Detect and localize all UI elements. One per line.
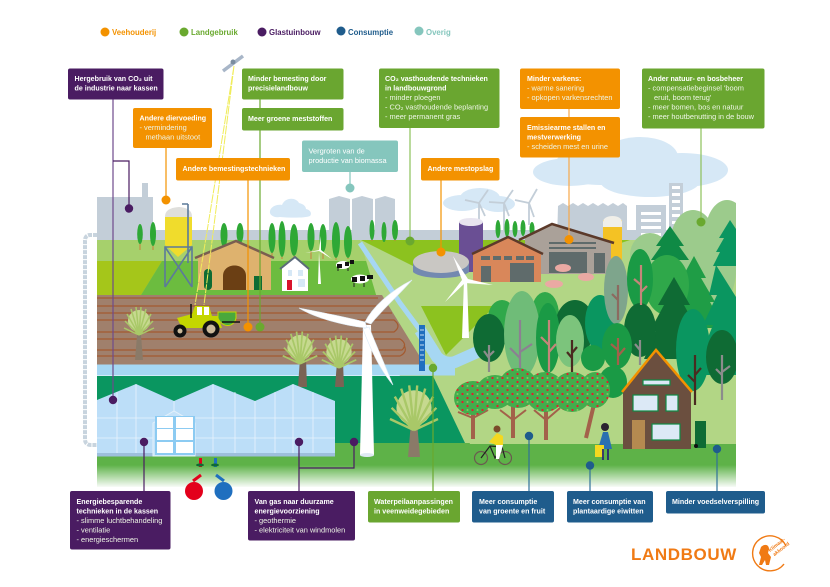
connector: waterpeil [429, 364, 437, 491]
connector: Hergebruik van CO2 [109, 99, 133, 404]
pipes [196, 458, 219, 467]
callout: Andere diervoeding [133, 108, 212, 148]
grass strip [97, 443, 736, 487]
callout: Minder bemesting: precisielandbouw [248, 84, 308, 92]
legend: Glastuinbouw: Glastuinbouw [269, 28, 321, 37]
callout: Meer consumptie plantaardige: plantaardige eiwitten [573, 508, 644, 516]
callout: Meer consumptie groente [472, 491, 554, 522]
callout: Emissiearme stallen: Emissiearme stallen en [527, 124, 605, 132]
callout: Van gas naar duurzame: - geothermie [254, 516, 296, 525]
callout: Andere diervoeding: - vermindering [140, 123, 187, 132]
callout: Minder bemesting [242, 68, 344, 100]
legend: Landgebruik: Landgebruik [191, 28, 238, 37]
callout: biomassa: productie van biomassa [308, 156, 387, 165]
callout: Minder varkens: Minder varkens: [527, 75, 581, 83]
legend: Consumptie [336, 26, 394, 37]
callout: Minder varkens: - warme sanering [527, 84, 584, 92]
water level gauge [419, 325, 425, 371]
callout: Energiebesparende technieken: - energieschermen [76, 535, 138, 544]
callout: Meer consumptie plantaardige: Meer consumptie van [573, 498, 646, 506]
big cloud [533, 137, 728, 197]
callout: Ander natuur- en bosbeheer: Ander natuur- en bosbeheer [648, 75, 743, 83]
callout: Andere bemestingstechnieken: Andere bemestingstechnieken [182, 165, 285, 173]
callout: Energiebesparende technieken: technieken in de kassen [76, 508, 158, 516]
satellite with beam [195, 56, 243, 305]
ploughed field [97, 295, 425, 365]
callout: CO2 vasthoudende technieken: - CO₂ vasthoudende beplanting [385, 102, 488, 112]
callout: Andere diervoeding: methaan uitstoot [146, 132, 200, 142]
grey pipe [85, 235, 97, 445]
callout: CO2 vasthoudende technieken: in landbouwgrond [385, 84, 446, 92]
callout: Hergebruik van CO2: Hergebruik van CO₂ uit [74, 75, 153, 83]
building windows [641, 186, 680, 236]
callout: Waterpeilaanpassingen: in veenweidegebieden [374, 508, 449, 516]
willows [124, 307, 438, 457]
callout: Meer groene meststoffen: Meer groene meststoffen [248, 115, 332, 123]
callout: biomassa: Vergroten van de [308, 146, 365, 156]
callout: Minder bemesting: Minder bemesting door [248, 75, 327, 83]
callout: Van gas naar duurzame [248, 491, 355, 540]
small clouds [270, 188, 515, 218]
connector: varkens [564, 109, 574, 244]
pigs [545, 264, 594, 288]
callout: Van gas naar duurzame: energievoorziening [254, 508, 320, 516]
callout: Minder varkens: - opkopen varkensrechten [527, 93, 612, 102]
orchard [454, 368, 610, 440]
callout: Waterpeilaanpassingen [368, 491, 460, 522]
scene illustration [97, 183, 749, 488]
horizon buildings [97, 183, 737, 242]
callout: Andere diervoeding: Andere diervoeding [140, 114, 206, 122]
callout: Emissiearme stallen: mestverwerking [527, 134, 581, 142]
callout: Van gas naar duurzame: - elektriciteit van windmolen [254, 526, 345, 534]
callout: Hergebruik van CO2 [68, 68, 164, 100]
callout: Van gas naar duurzame: Van gas naar duurzame [254, 498, 334, 506]
legend: Overig [414, 26, 451, 37]
cows [336, 260, 373, 287]
bottom fade [97, 465, 737, 488]
back forest hills [630, 200, 736, 306]
connector: groene meststoffen [256, 99, 264, 332]
callout: Energiebesparende technieken: Energiebesparende [76, 498, 142, 506]
connector: plantaardige eiwitten [586, 461, 594, 491]
callout: CO2 vasthoudende technieken: CO₂ vasthoudende technieken [385, 75, 488, 83]
callout: Ander natuur- en bosbeheer: - compensatiebeginsel 'boom [648, 84, 744, 92]
light orchard ground [470, 443, 736, 444]
forest trees [473, 249, 738, 405]
orange stable [472, 237, 543, 282]
callout: Ander natuur- en bosbeheer: - meer bomen, bos en natuur [648, 102, 744, 112]
connector: natuur [696, 128, 706, 226]
callout: Emissiearme stallen [520, 117, 620, 158]
callout: Ander natuur- en bosbeheer [642, 68, 764, 128]
small wind turbine [305, 236, 332, 284]
water [97, 243, 482, 370]
logo: Klimaatakkoord: Klimaat- [768, 537, 787, 554]
legend: Consumptie: Consumptie [348, 28, 394, 37]
callout: CO2 vasthoudende technieken [379, 68, 500, 128]
callout: Andere bemestingstechnieken [176, 158, 290, 180]
logo: Klimaatakkoord [753, 536, 791, 571]
barn [195, 241, 274, 290]
connector: mestopslag [436, 180, 446, 256]
fir trees [644, 220, 736, 375]
large wind turbine [299, 280, 412, 457]
callout: Minder voedselverspilling [666, 491, 765, 514]
meadows [97, 240, 736, 445]
callout: Meer consumptie groente: Meer consumptie [479, 498, 537, 506]
heat pipes with tanks [185, 475, 232, 500]
callout: Ander natuur- en bosbeheer: eruit, boom terug' [654, 93, 712, 102]
legend: Veehouderij: Veehouderij [112, 28, 156, 37]
legend: Overig: Overig [426, 28, 451, 37]
callout: Meer consumptie groente: van groente en fruit [479, 508, 546, 516]
green land under greenhouse [97, 376, 465, 443]
callout: CO2 vasthoudende technieken: - minder ploegen [385, 93, 440, 102]
digester [413, 251, 469, 278]
connector: groente en fruit [525, 432, 533, 491]
callout: Hergebruik van CO2: de industrie naar kassen [74, 84, 158, 92]
callout: Meer groene meststoffen [242, 108, 344, 130]
legend [100, 26, 451, 37]
grey stable [519, 224, 614, 274]
tractor [174, 304, 240, 338]
title: LANDBOUW [631, 545, 737, 564]
callout: Waterpeilaanpassingen: Waterpeilaanpassingen [374, 498, 453, 506]
farm silos [459, 216, 622, 272]
greenhouse [97, 384, 335, 456]
connector: voedselverspilling [713, 445, 721, 491]
connector: CO2 vasthoudende technieken [406, 128, 414, 246]
medium wind turbine [445, 256, 493, 338]
callout: biomassa [302, 140, 398, 172]
callout: CO2 vasthoudende technieken: - meer permanent gras [385, 112, 460, 121]
far left silo [165, 204, 192, 287]
callout: Energiebesparende technieken [70, 491, 170, 550]
connector: biomassa [346, 172, 354, 192]
logo: Klimaatakkoord: akkoord [772, 541, 791, 558]
poplars [137, 219, 534, 260]
white farmhouse [280, 257, 309, 291]
callout: Minder voedselverspilling: Minder voedselverspilling [672, 498, 759, 506]
connector: Andere diervoeding [162, 148, 170, 204]
callout: Emissiearme stallen: - scheiden mest en urine [527, 142, 608, 151]
connector: energiebesparende [140, 438, 148, 491]
callout: Meer consumptie plantaardige [567, 491, 653, 522]
callout: Andere mestopslag: Andere mestopslag [428, 165, 493, 173]
callout: Energiebesparende technieken: - ventilatie [76, 526, 110, 534]
callout: Energiebesparende technieken: - slimme luchtbehandeling [76, 516, 162, 525]
callout: Andere mestopslag [421, 158, 500, 180]
cyclist [474, 426, 512, 464]
callout: Ander natuur- en bosbeheer: - meer houtbenutting in de bouw [648, 112, 755, 121]
connector: Andere bemestingstechnieken [244, 180, 252, 332]
callout: Minder varkens [520, 68, 620, 109]
woman with bag [595, 423, 612, 460]
connector: gas naar duurzaam [295, 438, 358, 491]
house [622, 350, 692, 449]
background turbines [465, 189, 537, 235]
bin [694, 421, 706, 448]
